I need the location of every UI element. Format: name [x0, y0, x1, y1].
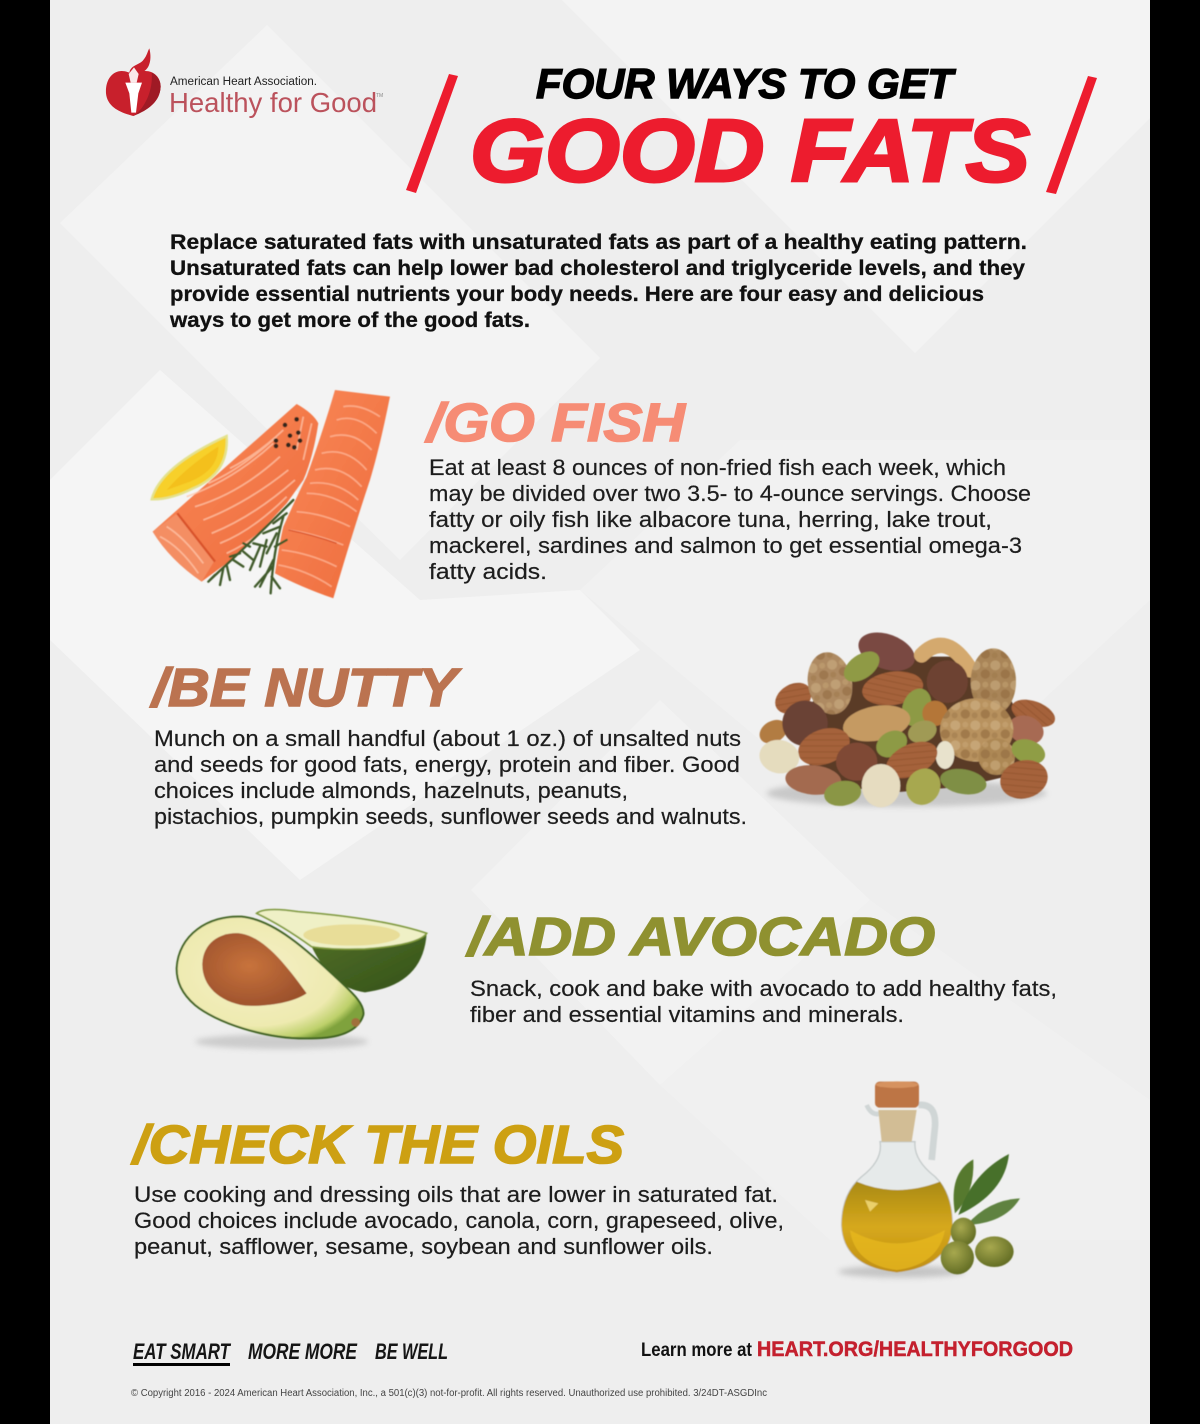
tagline: eat smart, move more, be well: MORE MORE: [248, 1339, 358, 1364]
icon: salmon fillets: [152, 390, 390, 598]
intro text: Unsaturated fats can help lower bad cholesterol and triglyceride levels, and they: [170, 256, 1025, 280]
body text: add avocado: [470, 976, 1057, 1027]
olives: [951, 1218, 976, 1246]
intro text: Replace saturated fats with unsaturated fats as part of a healthy eating pattern.: [170, 230, 1027, 254]
body text: be nutty: and seeds for good fats, energy, protein and fiber. Good: [154, 752, 740, 777]
body text: add avocado: Snack, cook and bake with avocado to add healthy fats,: [470, 976, 1057, 1001]
body text: go fish: may be divided over two 3.5- to 4-ounce servings. Choose: [429, 481, 1031, 506]
icon: pile of mixed nuts: [755, 625, 1059, 811]
handle: [918, 1105, 935, 1160]
heading: check the oils: /CHECK THE OILS: [131, 1115, 624, 1175]
footer: [131, 1338, 1073, 1399]
olive oil: [842, 1182, 952, 1272]
intro text: provide essential nutrients your body needs. Here are four easy and delicious: [170, 282, 984, 306]
intro text: ways to get more of the good fats.: [169, 308, 530, 332]
icon: olive oil bottle with olives: [838, 1081, 1020, 1278]
title line: four ways to get: FOUR WAYS TO GET: [536, 60, 956, 107]
body text: go fish: mackerel, sardines and salmon to get essential omega-3: [429, 533, 1022, 558]
panel: add avocado: [177, 907, 1057, 1049]
body text: be nutty: [154, 726, 747, 829]
avocado pit: [202, 933, 307, 1006]
learn more link: HEART.ORG/HEALTHYFORGOOD: [757, 1338, 1073, 1361]
panel: check the oils: [131, 1081, 1020, 1278]
rosemary sprig: [208, 500, 293, 593]
tagline: eat smart, move more, be well: BE WELL: [375, 1339, 448, 1364]
heading: go fish: /GO FISH: [425, 393, 686, 453]
left fillet: [153, 404, 318, 582]
body text: be nutty: pistachios, pumpkin seeds, sunflower seeds and walnuts.: [154, 804, 747, 829]
front avocado half: [177, 917, 363, 1038]
peppercorns: [274, 417, 302, 450]
intro text: [169, 230, 1027, 332]
heading: be nutty: /BE NUTTY: [150, 658, 462, 718]
body text: check the oils: Use cooking and dressing oils that are lower in saturated fat.: [134, 1182, 778, 1207]
copyright: © Copyright 2016 - 2024 American Heart Association, Inc., a 501(c)(3) not-for-profit. All rights reserved. Unauthorized use prohibited. 3/24DT-ASGDInc: [131, 1388, 767, 1399]
panel: go fish: [152, 390, 1031, 598]
left slash: [406, 74, 458, 193]
logo: American Heart Association Healthy for Good: TM: [376, 93, 383, 99]
bottle glass: [842, 1142, 952, 1272]
heading: add avocado: /ADD AVOCADO: [466, 907, 935, 967]
body text: check the oils: peanut, safflower, sesame, soybean and sunflower oils.: [134, 1234, 713, 1259]
body text: add avocado: fiber and essential vitamins and minerals.: [470, 1002, 904, 1027]
organization name: American Heart Association.: [170, 76, 317, 88]
title: [406, 60, 1097, 200]
icon: heart and torch: [106, 48, 161, 116]
lemon wedge: [152, 436, 227, 499]
olive leaves: [954, 1159, 973, 1213]
tagline: eat smart, move more, be well: EAT SMART: [133, 1339, 231, 1364]
panel: be nutty: [150, 625, 1059, 829]
learn more link: Learn more at: [641, 1340, 753, 1361]
body text: go fish: [429, 455, 1031, 584]
body text: check the oils: Good choices include avocado, canola, corn, grapeseed, olive,: [134, 1208, 784, 1233]
body text: go fish: fatty or oily fish like albacore tuna, herring, lake trout,: [429, 507, 992, 532]
Healthy for Good wordmark: Healthy for Good: [169, 87, 377, 118]
body text: be nutty: Munch on a small handful (about 1 oz.) of unsalted nuts: [154, 726, 741, 751]
body text: go fish: fatty acids.: [429, 559, 547, 584]
body text: check the oils: [134, 1182, 784, 1259]
logo: American Heart Association Healthy for Good: [106, 48, 383, 118]
right slash: [1046, 76, 1097, 194]
back avocado half: [257, 910, 427, 992]
body text: go fish: Eat at least 8 ounces of non-fried fish each week, which: [429, 455, 1006, 480]
right fillet: [275, 390, 390, 598]
cork: [878, 1110, 917, 1142]
learn more link: [641, 1338, 1073, 1361]
title line: good fats: GOOD FATS: [470, 101, 1030, 200]
body text: be nutty: choices include almonds, hazelnuts, peanuts,: [154, 778, 628, 803]
tagline: eat smart, move more, be well: [133, 1339, 448, 1366]
icon: halved avocado: [177, 910, 427, 1049]
